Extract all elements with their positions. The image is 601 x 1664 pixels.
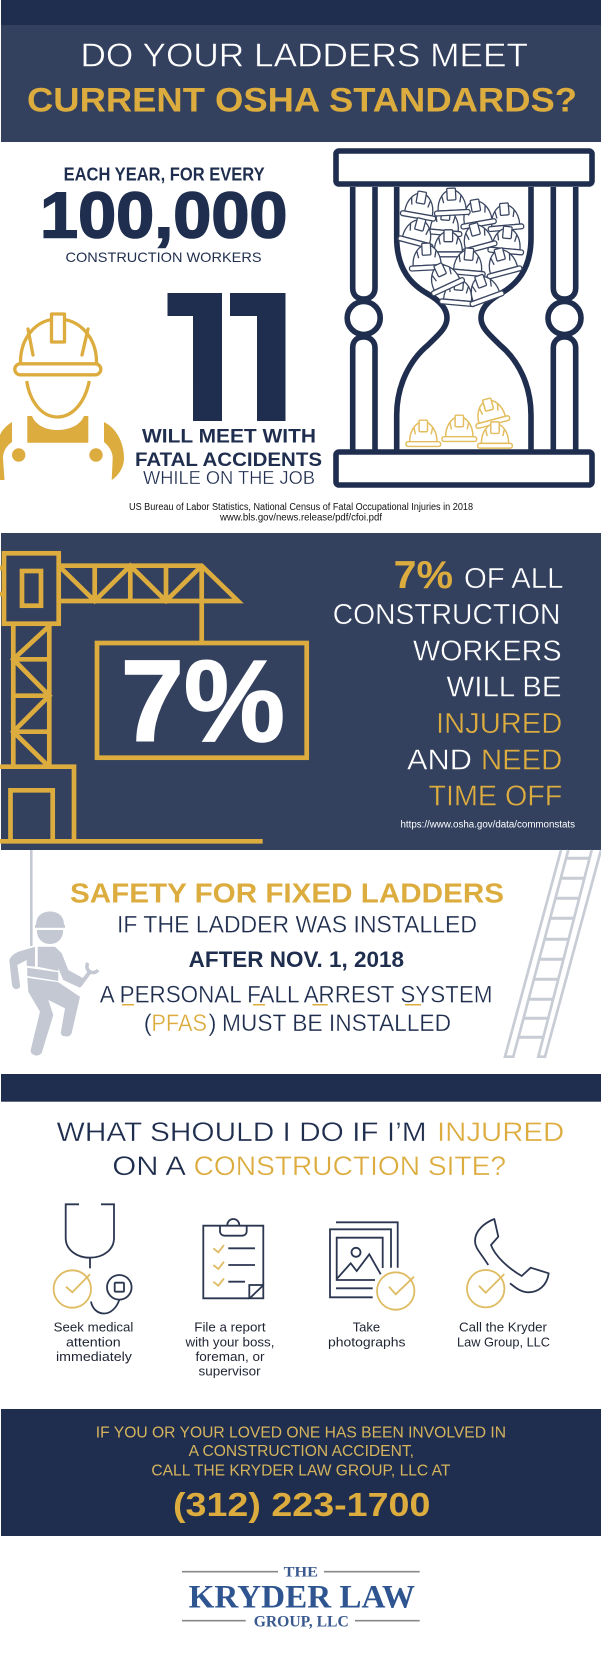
label: photographs	[328, 1336, 406, 1350]
helmets: fatal accidents	[406, 395, 512, 448]
panel: safety for fixed ladders	[9, 850, 601, 1057]
icon: phone handset	[467, 1219, 549, 1307]
text: if the ladder was installed: IF THE LADDER WAS INSTALLED	[117, 912, 477, 938]
logo: the kryder law group: GROUP, LLC	[254, 1614, 349, 1631]
text: 7% of all: 7%	[394, 554, 453, 597]
panel: call to action	[1, 1409, 601, 1536]
text: 7% of all: OF ALL	[464, 563, 563, 595]
heading: line two: ON A	[112, 1151, 186, 1181]
phone number: (312) 223-1700	[173, 1486, 430, 1523]
text: workers: WORKERS	[413, 636, 562, 668]
label: supervisor	[198, 1365, 261, 1379]
panel: injury statistic	[0, 533, 601, 850]
heading: line one: DO YOUR LADDERS MEET	[80, 36, 528, 74]
text: construction: CONSTRUCTION	[333, 599, 560, 631]
icon: tower crane	[0, 553, 307, 841]
step: seek medical attention	[54, 1204, 133, 1364]
text: each year for every: EACH YEAR, FOR EVERY	[64, 165, 265, 185]
text: time off: TIME OFF	[428, 780, 562, 812]
label: File a report	[194, 1321, 266, 1335]
text: and need	[407, 744, 562, 776]
number: 100,000: 100,000	[40, 178, 288, 252]
label: Call the Kryder	[459, 1321, 547, 1335]
text: fatal accidents: FATAL ACCIDENTS	[135, 449, 322, 471]
label: Take	[353, 1321, 380, 1335]
text: construction workers: CONSTRUCTION WORKERS	[66, 249, 262, 265]
source citation: US Bureau of Labor Statistics, National Census of Fatal Occupational Injuries in 2018	[129, 502, 473, 513]
text: pfas must be installed: MUST BE INSTALLED	[222, 1010, 451, 1037]
acronym underlines	[122, 1004, 421, 1006]
text: and need: AND	[407, 744, 472, 776]
text: while on the job: WHILE ON THE JOB	[143, 468, 315, 488]
text: a personal fall arrest system: A PERSONAL FALL ARREST SYSTEM	[100, 982, 492, 1009]
label	[457, 1321, 550, 1350]
helmets: many workers	[398, 187, 526, 307]
text: pfas must be installed: PFAS	[151, 1010, 207, 1037]
text: will meet with: WILL MEET WITH	[142, 426, 316, 448]
label: with your boss,	[184, 1336, 274, 1350]
text: call to action line three: CALL THE KRYDER LAW GROUP, LLC AT	[151, 1462, 451, 1479]
step: take photographs	[328, 1222, 414, 1350]
source url: https://www.osha.gov/data/commonstats	[400, 820, 575, 830]
panel: fatality statistics	[0, 151, 592, 524]
number: 11	[168, 293, 286, 421]
number: 7%: 7%	[121, 636, 285, 766]
heading: line one: WHAT SHOULD I DO IF I’M	[57, 1117, 427, 1147]
panel: what to do if injured	[54, 1117, 564, 1379]
step: file a report	[184, 1219, 274, 1379]
text: call to action line one: IF YOU OR YOUR LOVED ONE HAS BEEN INVOLVED IN	[96, 1424, 506, 1441]
logo: the kryder law group	[182, 1565, 420, 1631]
icon: photographs	[330, 1222, 414, 1310]
logo: the kryder law group: KRYDER LAW	[189, 1579, 415, 1615]
label	[184, 1321, 274, 1379]
text: pfas must be installed: (	[144, 1010, 152, 1037]
heading: line two: CURRENT OSHA STANDARDS?	[27, 82, 577, 120]
heading: line two: CONSTRUCTION SITE?	[194, 1151, 506, 1181]
logo: the kryder law group: THE	[284, 1565, 318, 1581]
heading: line one	[57, 1117, 564, 1147]
step: call the kryder law group	[457, 1219, 550, 1350]
label: immediately	[56, 1350, 133, 1364]
icon: stethoscope	[54, 1204, 132, 1314]
label: attention	[66, 1336, 121, 1350]
sign frame	[97, 643, 307, 758]
label	[328, 1321, 406, 1350]
divider band	[1, 1074, 601, 1102]
icon: worker on safety rope	[9, 850, 98, 1056]
label: Seek medical	[54, 1321, 133, 1335]
text: after nov. 1, 2018: AFTER NOV. 1, 2018	[189, 947, 404, 972]
panel: title header	[1, 0, 601, 142]
label	[54, 1321, 133, 1364]
icon: clipboard	[203, 1219, 263, 1298]
source url: www.bls.gov/news.release/pdf/cfoi.pdf	[219, 513, 382, 524]
label: foreman, or	[196, 1350, 264, 1364]
number: 11: 11	[154, 259, 317, 460]
label: Law Group, LLC	[457, 1336, 550, 1350]
text: and need: NEED	[481, 744, 562, 776]
icon: hourglass filled with helmets	[336, 151, 592, 485]
icon: ladder	[505, 850, 601, 1057]
heading: line one: INJURED	[437, 1117, 564, 1147]
heading: safety for fixed ladders: SAFETY FOR FIXED LADDERS	[70, 878, 504, 909]
text: injured: INJURED	[436, 708, 562, 740]
text: 7% of all	[394, 554, 563, 597]
text: pfas must be installed: )	[208, 1010, 216, 1037]
text: call to action line two: A CONSTRUCTION ACCIDENT,	[189, 1443, 414, 1460]
icon: gold construction worker	[0, 314, 124, 480]
text: will be: WILL BE	[446, 672, 562, 704]
